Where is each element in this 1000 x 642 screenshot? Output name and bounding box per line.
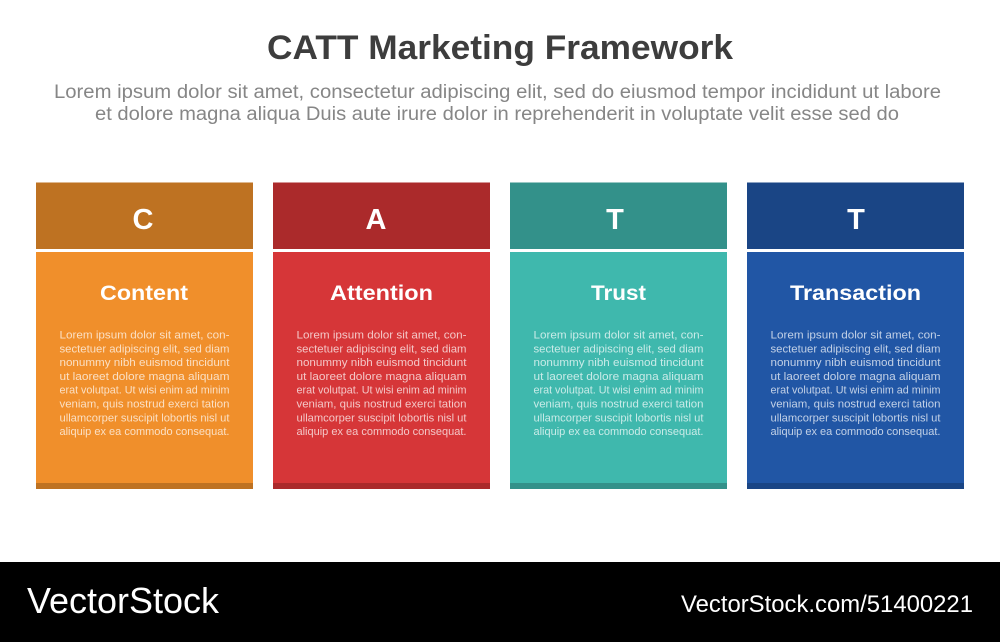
text block: Attention: ullamcorper suscipit lobortis nisl ut [296,412,467,424]
text block: Content: Lorem ipsum dolor sit amet, con- [60,330,230,342]
header: T [747,182,964,249]
text block: Attention: veniam, quis nostrud exerci tation [296,398,466,410]
header: A [273,182,490,249]
bottom strip [747,483,964,489]
text block: Content: ut laoreet dolore magna aliquam [60,371,230,383]
card body: Trust [510,252,727,489]
header: C: C [133,204,154,236]
text block: Transaction: ut laoreet dolore magna aliquam [770,371,940,383]
text block: Content: aliquip ex ea commodo consequat. [60,426,230,438]
bottom strip [510,483,727,489]
text block: Transaction: veniam, quis nostrud exerci tation [770,398,940,410]
subtitle text: et dolore magna aliqua Duis aute irure dolor in reprehenderit in voluptate velit esse sed do [95,104,899,125]
card body: Transaction [747,252,964,489]
card body: Attention [273,252,490,489]
header: C [36,182,253,249]
text block: Attention: sectetuer adipiscing elit, sed diam [296,343,466,355]
text block: Content [60,330,230,438]
card body: Content [36,252,253,489]
text block: Content: veniam, quis nostrud exerci tation [60,398,230,410]
text block: Transaction: ullamcorper suscipit lobortis nisl ut [770,412,941,424]
bottom strip [273,483,490,489]
text block: Attention: ut laoreet dolore magna aliquam [296,371,466,383]
text block: Transaction: aliquip ex ea commodo consequat. [770,426,940,438]
text block: Trust [534,330,704,438]
text block: Trust: sectetuer adipiscing elit, sed diam [534,343,704,355]
text block: Transaction: erat volutpat. Ut wisi enim ad minim [770,385,940,397]
header: T: T [606,204,624,236]
header: T [510,182,727,249]
text block: Trust: ullamcorper suscipit lobortis nisl ut [534,412,704,424]
text block: Trust: veniam, quis nostrud exerci tation [534,398,704,410]
text block: Content: nonummy nibh euismod tincidunt [60,357,230,369]
heading: Content: Content [100,282,188,305]
subtitle text [54,82,941,125]
footer image id: VectorStock.com/51400221 [681,591,973,618]
heading: Transaction: Transaction [790,282,921,305]
panel: Content [36,182,253,489]
text block: Transaction: Lorem ipsum dolor sit amet, con- [770,330,941,342]
heading: Trust: Trust [591,282,646,305]
text block: Transaction: nonummy nibh euismod tincidunt [770,357,941,369]
panel: Transaction [747,182,964,489]
header: T: T [847,204,865,236]
text block: Attention [296,330,467,438]
footer bar [0,562,1000,642]
text block: Trust: Lorem ipsum dolor sit amet, con- [534,330,704,342]
bottom strip [36,483,253,489]
text block: Content: sectetuer adipiscing elit, sed diam [60,343,230,355]
text block: Transaction [770,330,941,438]
header: A: A [366,204,387,236]
text block: Trust: nonummy nibh euismod tincidunt [534,357,704,369]
text block: Trust: aliquip ex ea commodo consequat. [534,426,704,438]
text block: Attention: nonummy nibh euismod tincidunt [296,357,467,369]
text block: Content: erat volutpat. Ut wisi enim ad minim [60,385,230,397]
heading: Attention: Attention [330,282,433,305]
text block: Trust: erat volutpat. Ut wisi enim ad minim [534,385,704,397]
subtitle text: Lorem ipsum dolor sit amet, consectetur adipiscing elit, sed do eiusmod tempor incididunt ut labore [54,82,941,103]
text block: Trust: ut laoreet dolore magna aliquam [534,371,704,383]
panel: Trust [510,182,727,489]
text block: Attention: Lorem ipsum dolor sit amet, con- [296,330,467,342]
footer logo text: VectorStock [27,580,220,621]
text block: Attention: erat volutpat. Ut wisi enim ad minim [296,385,466,397]
text block: Attention: aliquip ex ea commodo consequat. [296,426,466,438]
text block: Transaction: sectetuer adipiscing elit, sed diam [770,343,940,355]
title: CATT Marketing Framework [267,29,733,67]
panel: Attention [273,182,490,489]
text block: Content: ullamcorper suscipit lobortis nisl ut [60,412,230,424]
